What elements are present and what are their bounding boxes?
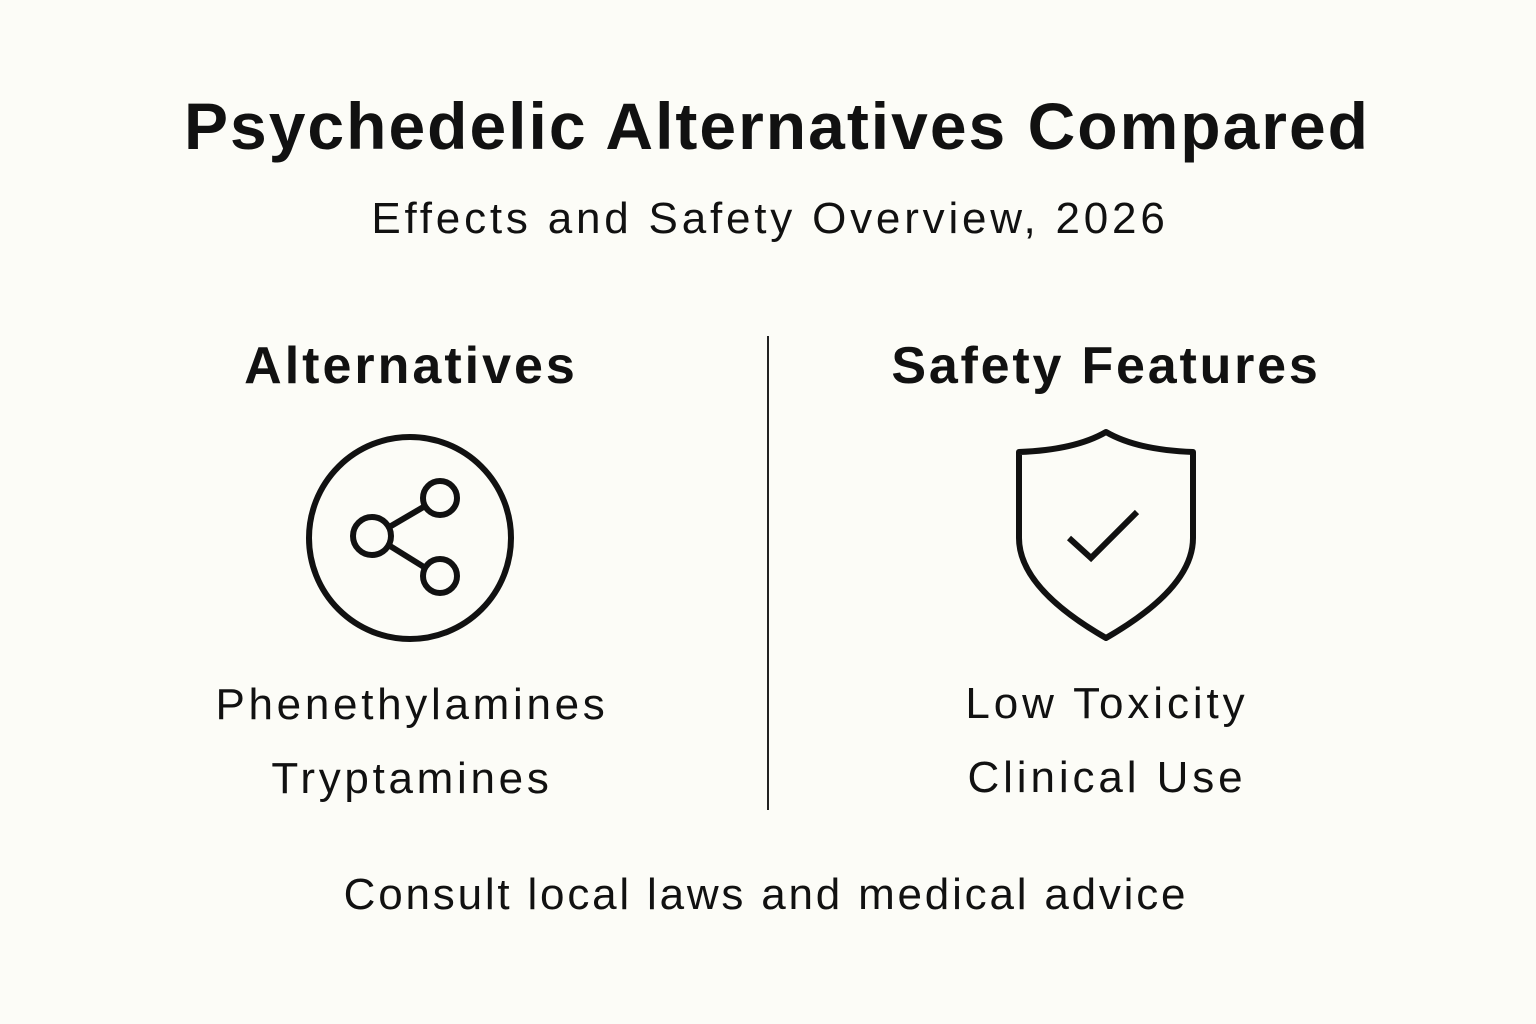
title: Psychedelic Alternatives Compared <box>184 89 1370 163</box>
heading: safety features: Safety Features <box>891 337 1321 395</box>
list: safety <box>965 679 1249 802</box>
icon: shield check <box>1016 429 1196 641</box>
divider <box>767 336 769 810</box>
list: safety: Clinical Use <box>967 753 1247 802</box>
list: alternatives <box>215 680 609 803</box>
footer note: Consult local laws and medical advice <box>344 870 1188 919</box>
panel: alternatives <box>215 337 609 803</box>
list: safety: Low Toxicity <box>965 679 1249 728</box>
heading: alternatives: Alternatives <box>244 337 578 395</box>
panel: safety features <box>891 337 1321 802</box>
list: alternatives: Phenethylamines <box>215 680 609 729</box>
icon: molecule circle <box>306 434 514 642</box>
subtitle: Effects and Safety Overview, 2026 <box>371 194 1169 243</box>
list: alternatives: Tryptamines <box>271 754 553 803</box>
